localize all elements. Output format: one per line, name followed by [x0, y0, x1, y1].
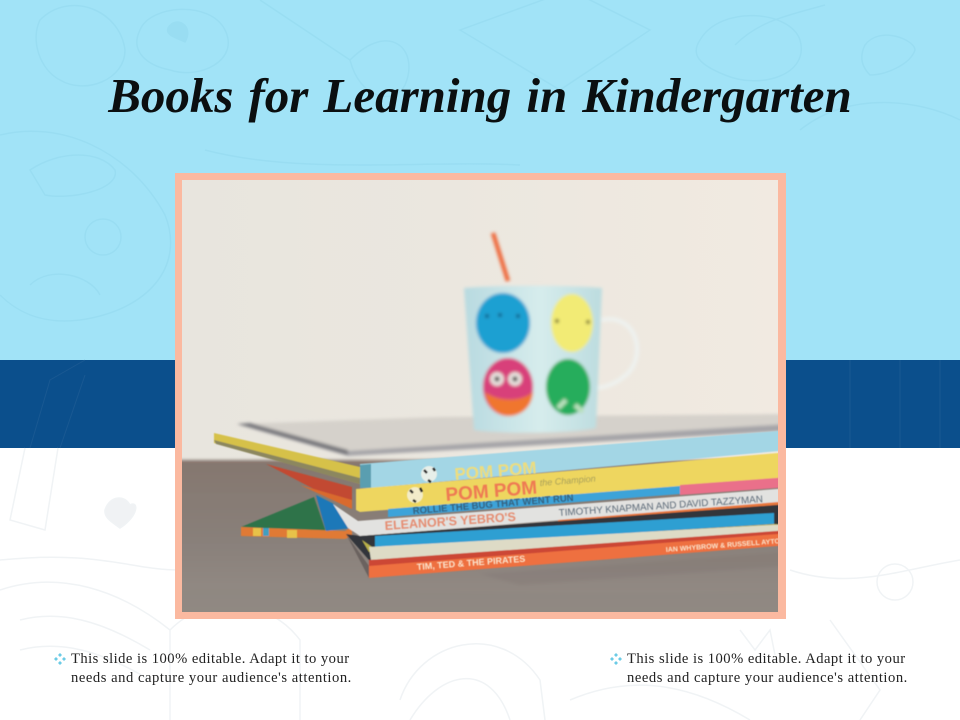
text: note right	[627, 651, 908, 686]
photo: stack of books with mug	[175, 173, 786, 619]
text: note right: needs and capture your audience's attention.	[627, 670, 908, 686]
icon: bullet diamonds right	[610, 653, 622, 665]
book spine lettering: the Champion	[539, 473, 596, 488]
dark gap	[346, 504, 790, 560]
text: note left: needs and capture your audience's attention.	[71, 670, 352, 686]
panda marks on spines	[407, 466, 437, 503]
top grey book	[237, 414, 790, 456]
book spine lettering	[384, 458, 781, 572]
book spine lettering: POM POM	[445, 478, 538, 506]
mug and straw	[464, 233, 637, 433]
note left	[54, 651, 352, 686]
photo frame	[175, 173, 786, 619]
left red covers	[267, 464, 352, 500]
table	[170, 460, 790, 620]
blue spine	[388, 486, 680, 517]
yellow Pom Pom book	[356, 452, 790, 512]
book spine lettering: IAN WHYBROW & RUSSELL AYTO	[666, 538, 781, 554]
book spine lettering: TIM, TED & THE PIRATES	[416, 554, 526, 572]
open green book behind	[241, 497, 326, 532]
blue Pom Pom book	[360, 430, 790, 488]
book spine lettering: POM POM	[454, 458, 537, 484]
text: note left: This slide is 100% editable. Adapt it to your	[71, 651, 350, 667]
wall	[182, 180, 778, 462]
book stack	[214, 430, 790, 578]
pale book	[369, 524, 790, 560]
title: Books for Learning in Kindergarten	[108, 68, 852, 123]
note right	[610, 651, 908, 686]
text: note right: This slide is 100% editable. Adapt it to your	[627, 651, 906, 667]
blue book	[375, 513, 774, 549]
book spine lettering: ROLLIE THE BUG THAT WENT RUN	[412, 493, 574, 517]
yellow cover left	[214, 433, 360, 484]
white Eleanor book	[333, 488, 790, 536]
book spine lettering: ELEANOR'S YEBRO'S	[384, 510, 516, 533]
icon: bullet diamonds left	[54, 653, 66, 665]
book spine lettering: TIMOTHY KNAPMAN AND DAVID TAZZYMAN	[558, 494, 763, 519]
text: note left	[71, 651, 352, 686]
red and orange pirates book	[369, 530, 790, 567]
